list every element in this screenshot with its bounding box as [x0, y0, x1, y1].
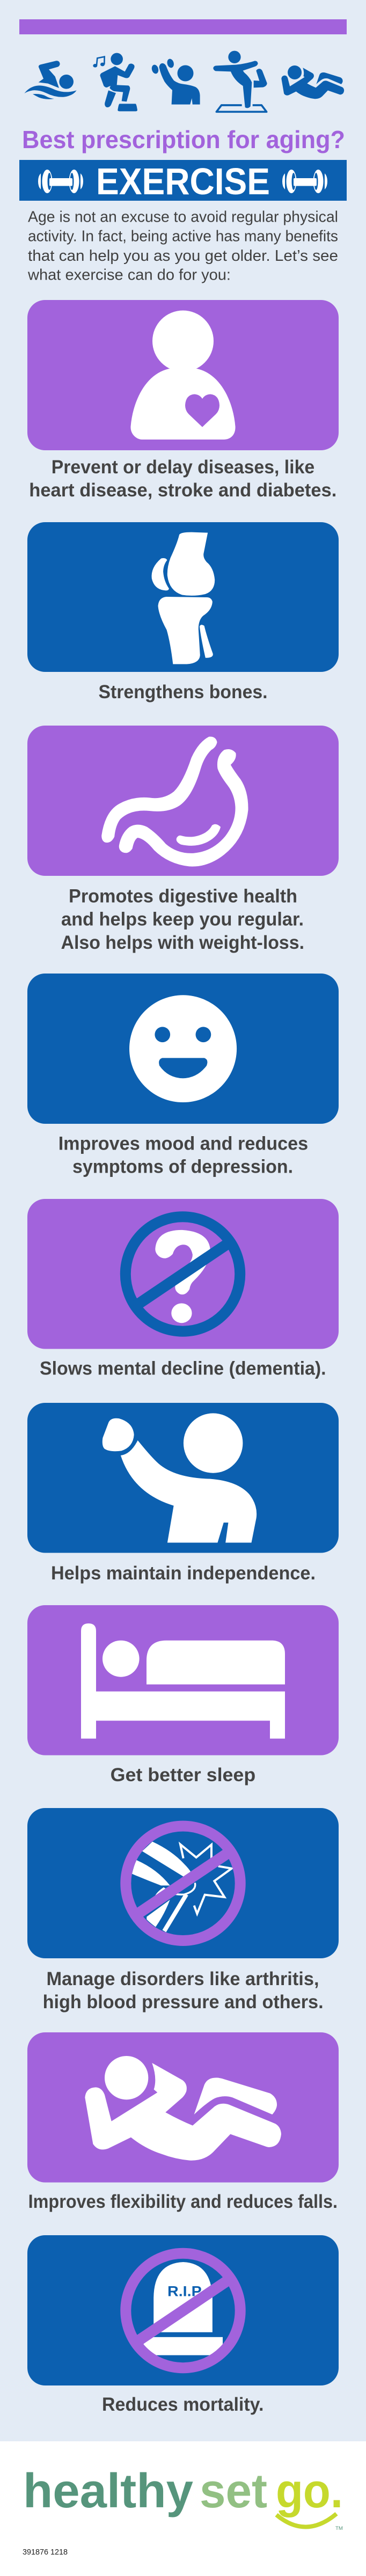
icon: crossed-out tombstone [126, 2253, 240, 2368]
caption [43, 1968, 324, 2012]
icon: stomach [101, 737, 248, 867]
caption [61, 886, 304, 953]
icon: smiley face [129, 995, 237, 1102]
intro paragraph [27, 209, 338, 283]
icon: balance pose on mat [213, 51, 267, 112]
caption: Reduces mortality. [102, 2394, 264, 2415]
logo: healthy set go: healthy [23, 2464, 193, 2518]
top purple bar [19, 19, 347, 34]
panel: reduces mortality [27, 2235, 339, 2415]
code number: 391876 1218 [23, 2548, 68, 2557]
caption: Improves flexibility and reduces falls. [28, 2191, 338, 2212]
caption: symptoms of depression. [72, 1157, 293, 1177]
panel: prevent diseases [27, 300, 339, 501]
icon: person lifting dumbbell [151, 58, 200, 105]
caption: high blood pressure and others. [43, 1992, 324, 2012]
panel: digestive health [27, 726, 339, 953]
panel: flexibility [27, 2032, 339, 2212]
exercise banner [19, 160, 347, 202]
panel: manage disorders [27, 1808, 339, 2012]
icon: right dumbbell [282, 170, 327, 193]
icon: crossed-out painful knee [126, 1826, 240, 1941]
caption: Helps maintain independence. [51, 1563, 316, 1584]
panel: maintain independence [27, 1403, 339, 1584]
icon: person raising arm [103, 1413, 257, 1542]
icon: crossed-out question mark [126, 1217, 240, 1331]
logo: healthy set go: set [200, 2464, 267, 2518]
caption [58, 1133, 308, 1177]
icon: person with heart [130, 310, 236, 440]
intro paragraph: activity. In fact, being active has many benefits [28, 228, 338, 245]
intro paragraph: that can help you as you get older. Let’s see [28, 247, 338, 265]
intro paragraph: what exercise can do for you: [27, 266, 231, 283]
icon: knee joint [152, 532, 215, 664]
icon: step aerobics dancer with music note [93, 53, 137, 111]
icon: person in bed [81, 1623, 285, 1739]
caption: Improves mood and reduces [58, 1133, 308, 1154]
caption: and helps keep you regular. [61, 909, 304, 930]
intro paragraph: Age is not an excuse to avoid regular physical [28, 209, 338, 226]
heading: EXERCISE: EXERCISE [96, 160, 270, 202]
logo: healthy set go [23, 2464, 343, 2531]
caption: Slows mental decline (dementia). [40, 1358, 326, 1379]
icon: person doing crunches [85, 2056, 281, 2161]
icon: left dumbbell [38, 170, 83, 193]
row of exercise icons [24, 51, 344, 112]
caption [29, 457, 336, 501]
caption: Promotes digestive health [69, 886, 297, 907]
icon: crossed-out tombstone: R.I.P. [167, 2284, 204, 2300]
icon: crunches [281, 65, 344, 99]
logo: healthy set go: go. [276, 2464, 343, 2518]
caption: Prevent or delay diseases, like [52, 457, 314, 478]
caption: Also helps with weight-loss. [61, 932, 304, 953]
panel: strengthens bones [27, 522, 339, 702]
icon: swimmer [24, 61, 77, 99]
panel: better sleep [27, 1605, 339, 1785]
panel: improves mood [27, 974, 339, 1177]
caption: Strengthens bones. [99, 682, 267, 702]
logo: healthy set go: TM [335, 2526, 343, 2531]
panel: slows mental decline [27, 1199, 339, 1379]
caption: heart disease, stroke and diabetes. [29, 480, 336, 501]
title: Best prescription for aging? [22, 126, 345, 153]
caption: Get better sleep [111, 1765, 255, 1785]
caption: Manage disorders like arthritis, [46, 1968, 319, 1989]
